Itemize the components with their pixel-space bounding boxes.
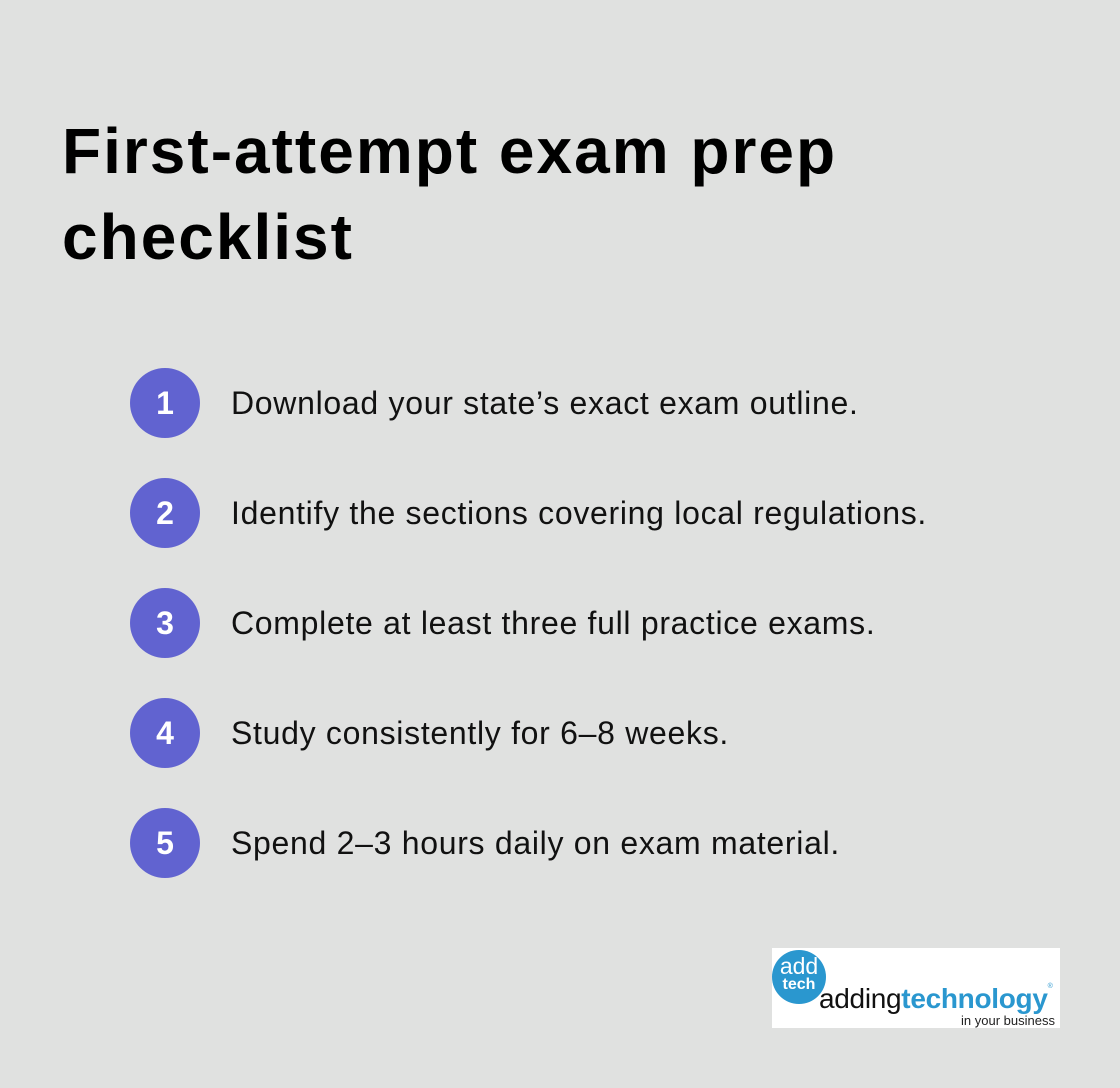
item 3: 3 [156, 605, 174, 641]
item 4 [130, 698, 729, 768]
item 1: 1 [156, 385, 174, 421]
title: First-attempt exam prep [62, 115, 837, 187]
logo: tech [783, 976, 815, 993]
item 2: Identify the sections covering local regulations. [231, 495, 927, 531]
item 1 [130, 368, 859, 438]
logo: add [780, 953, 818, 979]
logo: in your business [961, 1013, 1055, 1028]
item 3: Complete at least three full practice exams. [231, 605, 875, 641]
item 1: Download your state’s exact exam outline. [231, 385, 859, 421]
item 5: Spend 2–3 hours daily on exam material. [231, 825, 840, 861]
logo [772, 948, 1060, 1028]
item 3 [130, 588, 875, 658]
title [62, 115, 837, 273]
logo: addingtechnology® [819, 983, 1052, 1014]
item 5 [130, 808, 840, 878]
item 5: 5 [156, 825, 174, 861]
item 2 [130, 478, 927, 548]
item 2: 2 [156, 495, 174, 531]
item 4: Study consistently for 6–8 weeks. [231, 715, 729, 751]
title: checklist [62, 201, 354, 273]
item 4: 4 [156, 715, 174, 751]
